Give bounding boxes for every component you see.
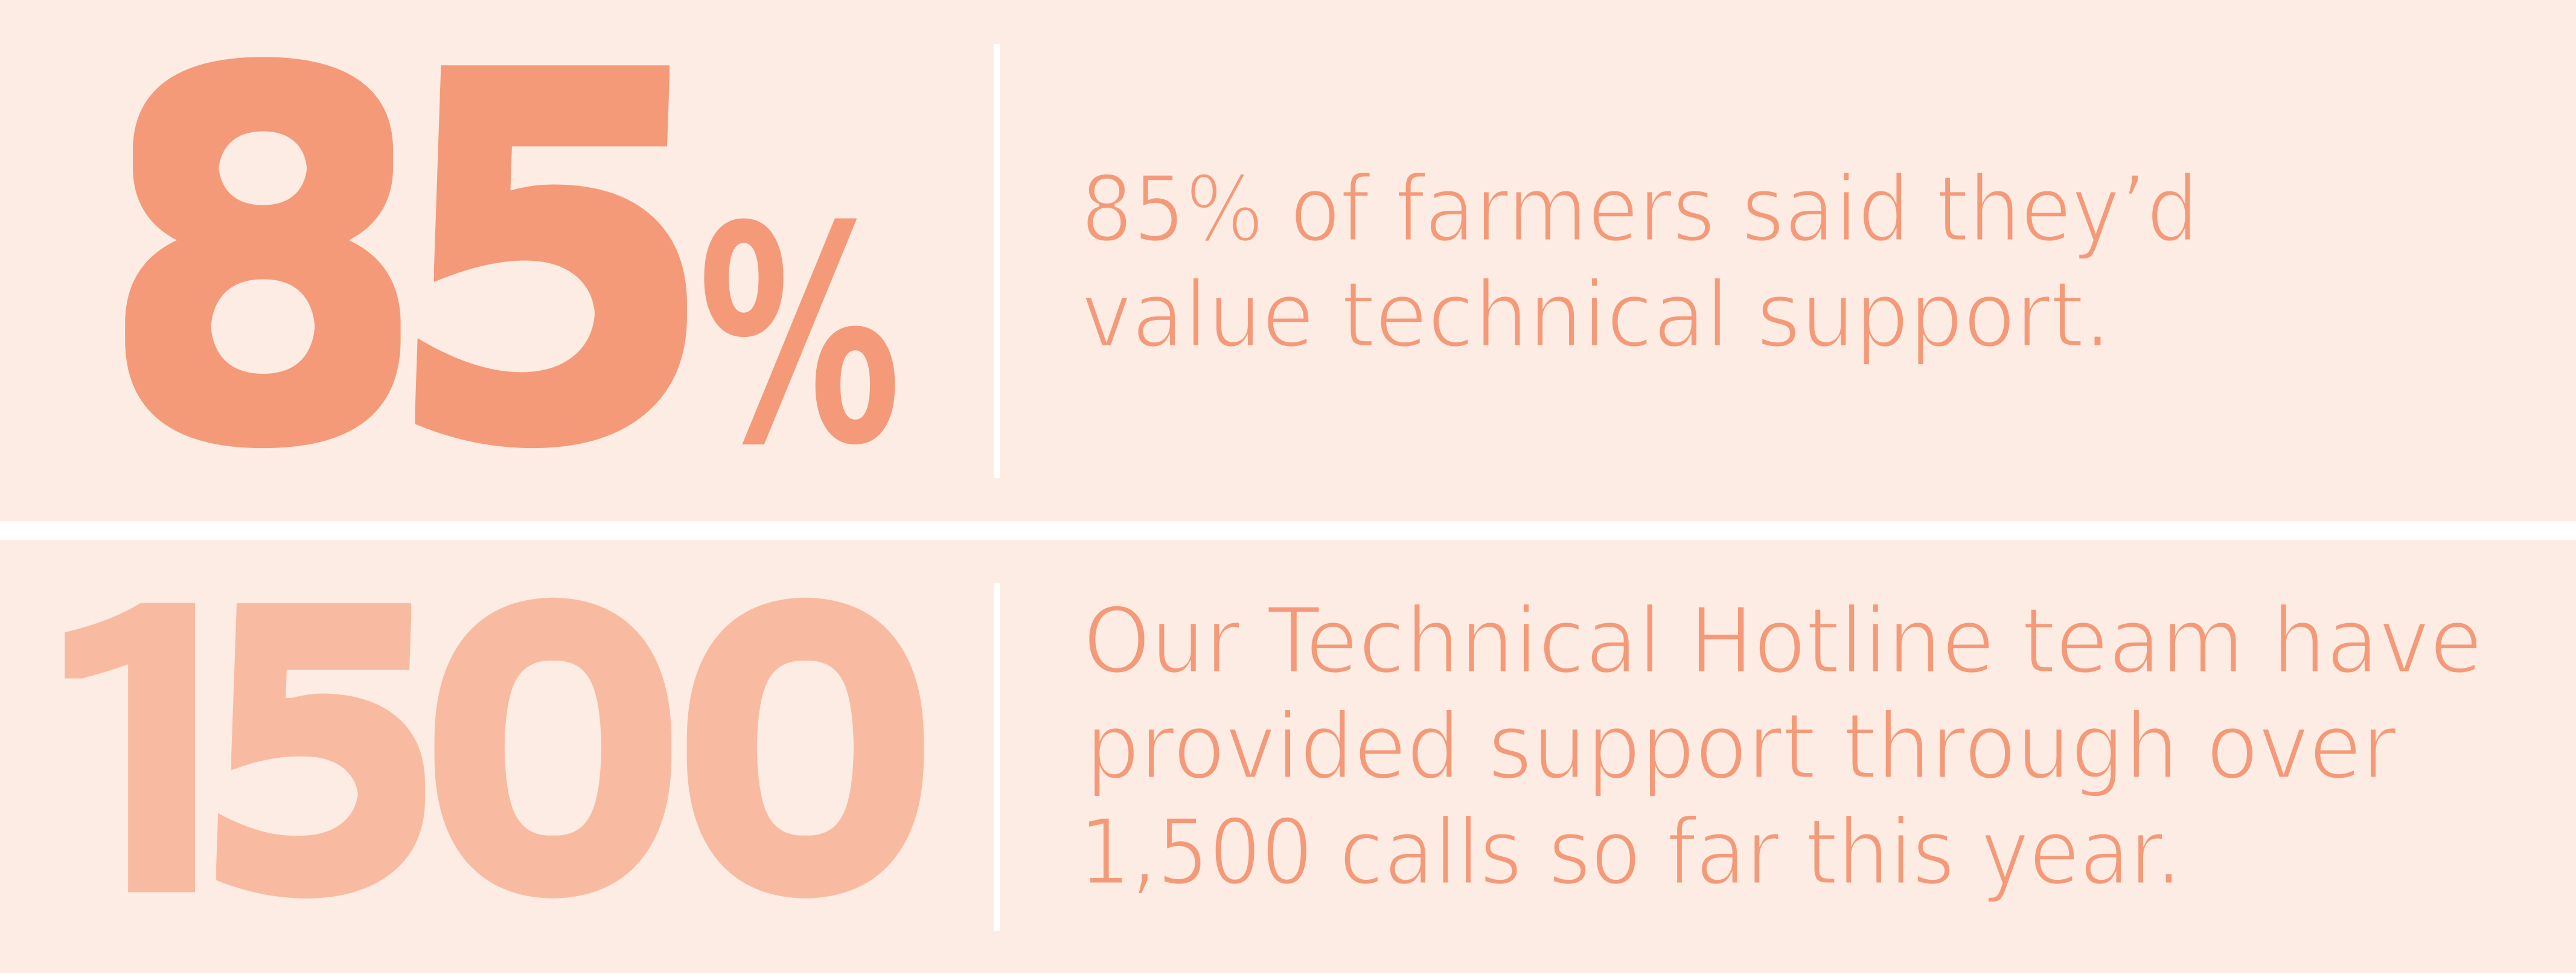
text: 85% of farmers: 85% of farmers said they’d [1081, 156, 2199, 263]
text: technical hotline: provided support through over [1085, 693, 2397, 800]
text: 85% of farmers: value technical support. [1081, 261, 2111, 368]
text: technical hotline: Our Technical Hotline team have [1083, 588, 2482, 694]
text: technical hotline: 1,500 calls so far this year. [1079, 799, 2182, 906]
big number: 1500: 1 [2, 560, 304, 952]
big number: 1500: 0 [664, 535, 946, 976]
big number: 85%: % [698, 163, 901, 511]
text: technical hotline [1079, 588, 2482, 906]
text: 85% of farmers [1081, 156, 2199, 368]
big number: 85% [95, 0, 901, 553]
divider: top panel [994, 44, 1000, 478]
big number: 1500: 0 [412, 535, 694, 976]
panel: 85% statistic [0, 0, 2576, 553]
big number: 1500 [2, 535, 946, 976]
divider: bottom panel [994, 583, 1000, 931]
big number: 1500: 5 [180, 536, 464, 975]
panel: 1500 statistic [0, 535, 2576, 976]
